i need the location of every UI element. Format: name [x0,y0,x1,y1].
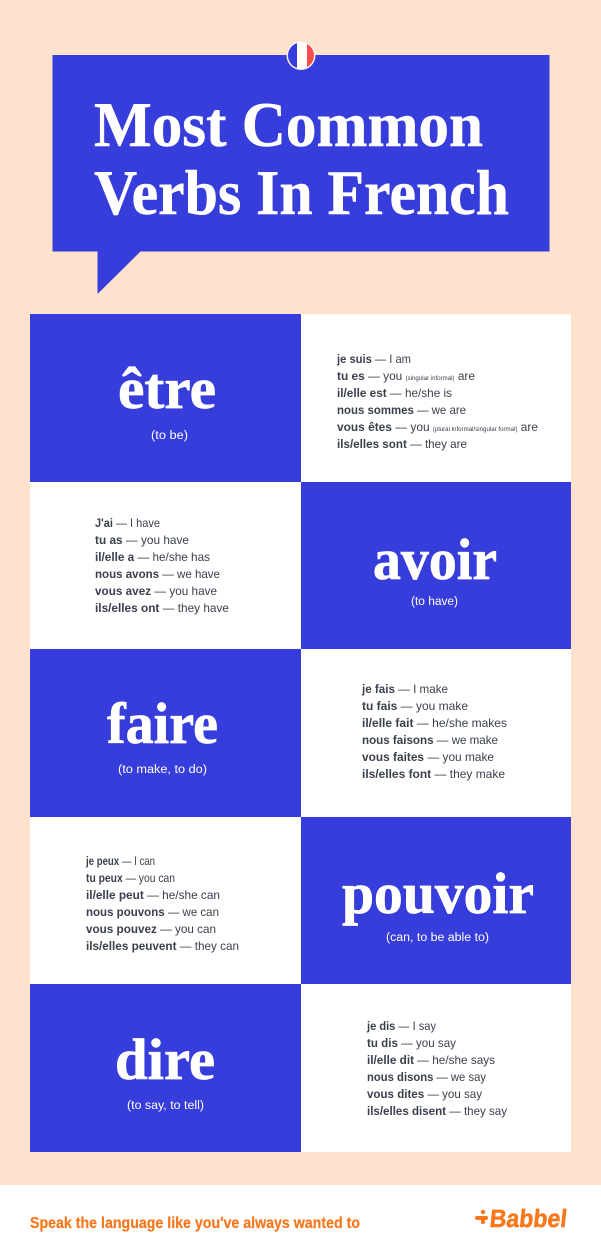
panel: dire conjugations: il/elle dit — he/she says [367,1053,495,1067]
panel: avoir conjugations: ils/elles ont — they have [95,601,229,615]
panel: faire conjugations: nous faisons — we make [362,733,498,747]
translation: can, to be able to: (can, to be able to) [386,932,489,944]
footer [0,1185,601,1254]
panel: pouvoir conjugations: tu peux — you can [86,871,175,885]
panel: pouvoir conjugations: ils/elles peuvent — they can [86,939,239,953]
panel: avoir conjugations: nous avons — we have [95,567,220,581]
panel: être conjugations [301,314,571,482]
title: Verbs In French [94,157,509,228]
panel: faire [30,649,301,817]
title speech bubble [52,41,550,294]
panel: dire conjugations: nous disons — we say [367,1070,486,1084]
panel: pouvoir [301,817,571,984]
title: Most Common [94,89,483,160]
title [94,89,509,228]
heading: être: être [118,356,216,421]
panel: faire conjugations: vous faites — you make [362,750,494,764]
heading: dire: dire [115,1027,215,1092]
panel: faire conjugations: je fais — I make [361,682,448,696]
panel: dire conjugations: tu dis — you say [367,1036,456,1050]
panel: faire conjugations: tu fais — you make [362,699,468,713]
translation: to make, to do: (to make, to do) [118,764,207,776]
panel: faire conjugations: il/elle fait — he/she makes [362,716,507,730]
panel: être conjugations: ils/elles sont — they are [337,437,467,451]
panel: faire conjugations [301,649,571,817]
panel: avoir conjugations [30,482,301,649]
panel: faire conjugations: ils/elles font — they make [362,767,505,781]
panel: être conjugations: il/elle est — he/she is [337,386,452,400]
panel: être [30,314,301,482]
panel: avoir conjugations: il/elle a — he/she has [95,550,210,564]
panel: être conjugations: nous sommes — we are [337,403,466,417]
panel: dire conjugations: vous dites — you say [367,1087,482,1101]
heading: pouvoir: pouvoir [342,861,534,926]
translation: to say, to tell: (to say, to tell) [127,1100,204,1112]
panel: pouvoir conjugations: vous pouvez — you can [86,922,216,936]
panel: dire [30,984,301,1152]
panel: pouvoir conjugations [30,817,301,984]
panel: avoir conjugations: J'ai — I have [95,516,160,530]
panel: être conjugations: je suis — I am [336,352,411,366]
panel: avoir [301,482,571,649]
panel: avoir conjugations: vous avez — you have [95,584,217,598]
icon: French flag [286,41,317,70]
panel: pouvoir conjugations: nous pouvons — we can [86,905,219,919]
panel: être conjugations: tu es — you (singular informal) are [337,369,475,383]
heading: faire: faire [107,691,218,756]
panel: avoir conjugations: tu as — you have [95,533,189,547]
panel: pouvoir conjugations: il/elle peut — he/she can [86,888,220,902]
panel: dire conjugations [301,984,571,1152]
panel: pouvoir conjugations: je peux — I can [85,854,155,868]
translation: to have: (to have) [411,596,458,608]
translation: to be: (to be) [151,430,188,442]
panel: dire conjugations: je dis — I say [366,1019,436,1033]
tagline: Speak the language like you've always wanted to [30,1215,360,1232]
logo: Babbel: Babbel [488,1205,568,1233]
panel: dire conjugations: ils/elles disent — they say [367,1104,507,1118]
heading: avoir: avoir [373,527,497,592]
panel: être conjugations: vous êtes — you (plural informal/singular formal) are [337,420,538,434]
